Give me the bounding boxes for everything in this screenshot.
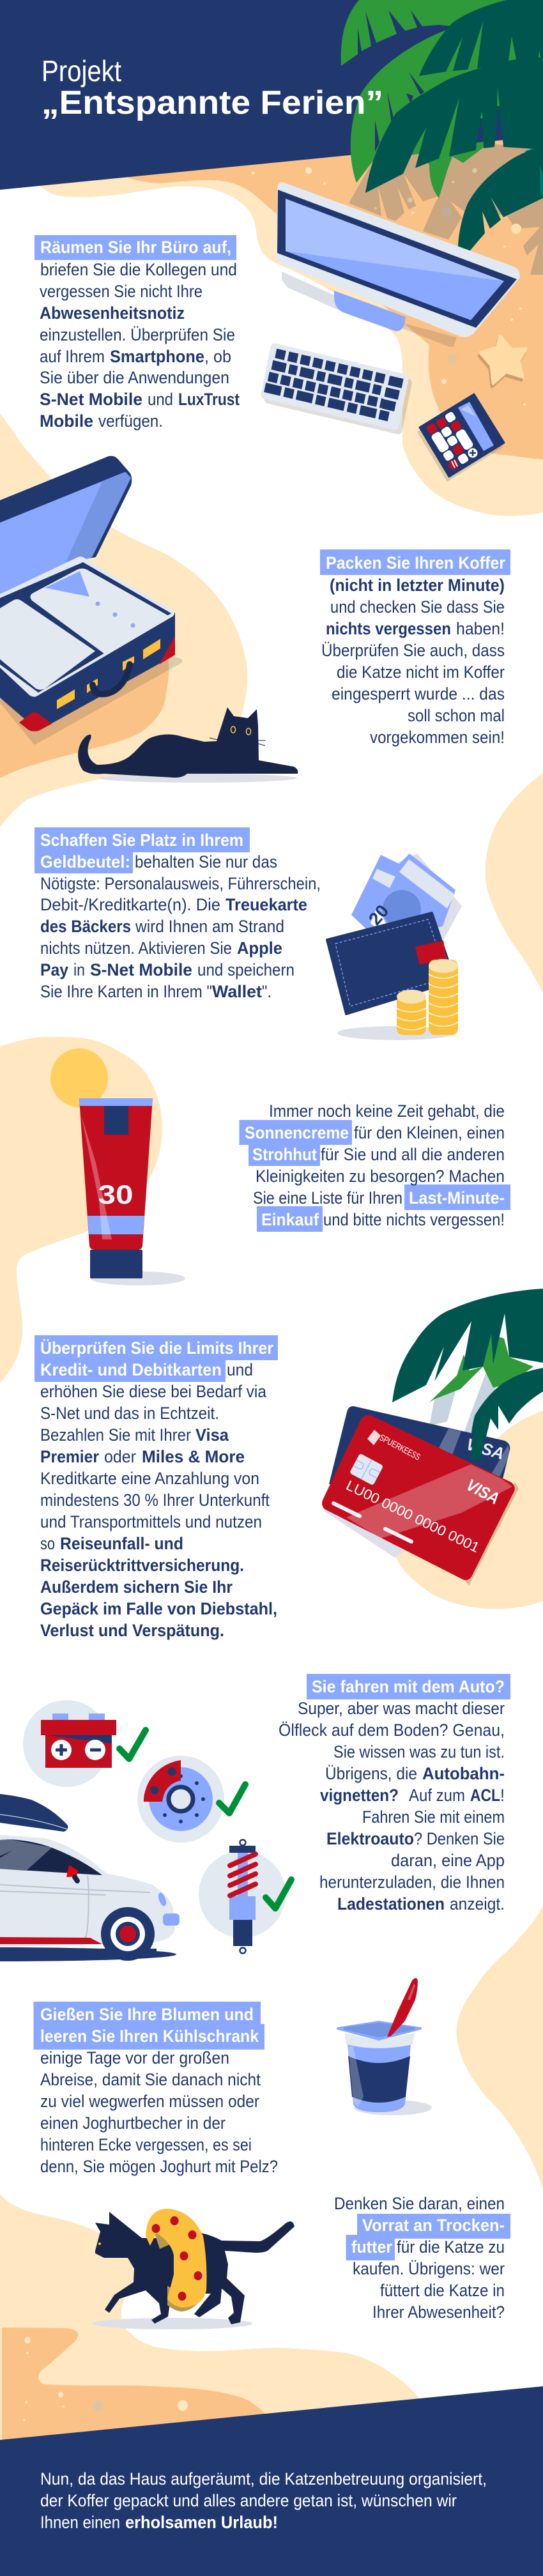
background: bottom sand dark with pebbles xyxy=(2,2327,265,2447)
text block: Kühlschrank: einen Joghurtbecher in der xyxy=(40,2113,226,2133)
text block: Büro: Abwesenheitsnotiz xyxy=(40,303,185,323)
text block: Koffer: haben! xyxy=(456,619,505,638)
text block: Kühlschrank: Gießen Sie Ihre Blumen und xyxy=(40,2005,254,2024)
text block: Kühlschrank: denn, Sie mögen Joghurt mit Pelz? xyxy=(40,2157,278,2176)
footer text: Ihnen einen xyxy=(40,2513,120,2532)
text block: Sonnencreme: Immer noch keine Zeit gehabt, die xyxy=(269,1101,505,1121)
text block: Kühlschrank: zu viel wegwerfen müssen oder xyxy=(40,2092,259,2111)
text block: Büro: einzustellen. Überprüfen Sie xyxy=(40,325,235,344)
background: top sand dark xyxy=(128,115,543,459)
text block: Koffer: nichts vergessen xyxy=(326,619,451,638)
text block: Limits: mindestens 30 % Ihrer Unterkunft xyxy=(40,1491,270,1510)
icon: shock absorber xyxy=(199,1840,286,1954)
text block: Sonnencreme: Last-Minute- xyxy=(409,1188,505,1208)
header band xyxy=(0,0,543,190)
text block: Koffer: die Katze nicht im Koffer xyxy=(337,663,505,682)
icon: car battery xyxy=(23,1700,116,1787)
text block: Limits: S-Net und das in Echtzeit. xyxy=(40,1404,219,1423)
text block: Trockenfutter: futter xyxy=(351,2237,392,2257)
text block: Koffer: vorgekommen sein! xyxy=(370,728,505,747)
icon: bank cards: SPUERKEESS xyxy=(378,1432,422,1462)
text block: Limits: Verlust und Verspätung. xyxy=(40,1621,224,1640)
footer band xyxy=(0,2386,543,2576)
icon: wallet with banknotes and coins xyxy=(327,854,462,1040)
text block: Auto: herunterzuladen, die Ihnen xyxy=(319,1873,505,1892)
text block: Trockenfutter: füttert die Katze in xyxy=(380,2281,505,2300)
text block: Geldbeutel: ". xyxy=(262,982,272,1001)
icon: lying cat xyxy=(78,707,298,783)
text block: Limits: oder xyxy=(104,1447,136,1466)
text block: Büro: vergessen Sie nicht Ihre xyxy=(40,282,203,301)
footer text: der Koffer gepackt und alles andere getan ist, wünschen wir xyxy=(40,2491,457,2510)
text block: Sonnencreme: Einkauf xyxy=(261,1210,319,1229)
text block: Büro: und xyxy=(148,390,173,409)
text block: Limits: Miles & More xyxy=(142,1447,245,1466)
text block: Büro: Smartphone xyxy=(110,347,204,366)
text block: Geldbeutel: S-Net Mobile xyxy=(90,960,192,979)
text block: Auto: Auf zum xyxy=(409,1786,465,1805)
text block: Kühlschrank: einige Tage vor der großen xyxy=(40,2048,229,2067)
text block: Trockenfutter: kaufen. Übrigens: wer xyxy=(353,2259,505,2278)
text block: Kühlschrank: leeren Sie Ihren Kühlschrank xyxy=(40,2027,259,2046)
text block: Büro: briefen Sie die Kollegen und xyxy=(40,260,237,279)
text block: Limits: Kredit- und Debitkarten xyxy=(40,1360,222,1379)
icon: sun xyxy=(50,1048,108,1107)
text block: Sonnencreme: für Sie und all die anderen xyxy=(321,1145,505,1164)
text block: Auto: anzeigt. xyxy=(450,1894,505,1913)
text block: Geldbeutel: Pay xyxy=(40,960,68,979)
text block: Trockenfutter: für die Katze zu xyxy=(397,2237,505,2257)
background: suitcase sand light xyxy=(0,413,247,827)
icon: sunscreen tube xyxy=(79,1098,185,1285)
icon: bank cards: LU00 0000 0000 0001 xyxy=(344,1477,482,1556)
text block: Büro: verfügen. xyxy=(98,411,163,431)
icon: check mark 2 xyxy=(219,1784,245,1813)
text block: Limits: erhöhen Sie diese bei Bedarf via xyxy=(40,1382,266,1401)
icon: brake disc xyxy=(137,1756,224,1843)
text block: Büro: Räumen Sie Ihr Büro auf, xyxy=(40,238,231,257)
text block: Limits: Premier xyxy=(40,1447,99,1466)
text block: Geldbeutel: behalten Sie nur das xyxy=(135,852,277,871)
text block: Auto: Fahren Sie mit einem xyxy=(362,1807,505,1827)
text block: Koffer: eingesperrt wurde ... das xyxy=(332,684,505,703)
text block: Büro: Mobile xyxy=(40,411,93,431)
text block: Koffer: soll schon mal xyxy=(408,706,505,725)
text block: Sonnencreme: und bitte nichts vergessen! xyxy=(323,1210,505,1229)
icon: starfish xyxy=(479,336,526,387)
sand pebbles top xyxy=(252,167,526,406)
text block: Limits: so xyxy=(40,1534,55,1553)
background: card sand xyxy=(393,1411,543,1609)
text block: Auto: daran, eine App xyxy=(391,1851,505,1870)
text block: Limits xyxy=(34,1335,278,1640)
background: wallet sand xyxy=(486,773,543,993)
text block: Sonnencreme: Strohhut xyxy=(252,1145,317,1164)
text block: Limits: Kreditkarte eine Anzahlung von xyxy=(40,1469,259,1488)
text block: Auto: Ladestationen xyxy=(337,1894,445,1913)
text block: Geldbeutel: Schaffen Sie Platz in Ihrem xyxy=(40,831,243,850)
text block: Auto: Ölfleck auf dem Boden? Genau, xyxy=(279,1721,505,1740)
icon: bank cards: VISA xyxy=(463,1475,503,1508)
icon: walking cat with swim ring xyxy=(93,2209,294,2329)
text block: Auto: vignetten? xyxy=(320,1786,399,1805)
text block: Sonnencreme: Sonnencreme xyxy=(245,1123,349,1142)
text block: Geldbeutel: Apple xyxy=(237,939,282,958)
text block: Geldbeutel: Nötigste: Personalausweis, Führerschein, xyxy=(40,874,321,893)
text block: Trockenfutter xyxy=(334,2194,510,2322)
text block: Koffer: Überprüfen Sie auch, dass xyxy=(321,641,505,660)
text block: Trockenfutter: Vorrat an Trocken- xyxy=(362,2216,505,2235)
text block: Geldbeutel: wird Ihnen am Strand xyxy=(135,917,284,936)
footer text xyxy=(40,2469,487,2532)
text block: Trockenfutter: Denken Sie daran, einen xyxy=(334,2194,505,2213)
text block: Limits: Reiserücktrittversicherung. xyxy=(40,1556,244,1575)
footer text: Nun, da das Haus aufgeräumt, die Katzenbetreuung organisiert, xyxy=(40,2469,487,2488)
title xyxy=(42,54,383,121)
text block: Geldbeutel: Treuekarte xyxy=(226,895,307,914)
icon: check mark 1 xyxy=(119,1730,146,1759)
text block: Geldbeutel xyxy=(34,827,321,1001)
text block: Auto: ! xyxy=(500,1786,505,1805)
text block: Geldbeutel: in xyxy=(73,960,85,979)
text block: Trockenfutter: Ihrer Abwesenheit? xyxy=(372,2303,505,2322)
background: sunscreen sand xyxy=(0,1037,162,1383)
text block: Büro: S-Net Mobile xyxy=(40,390,142,409)
text block: Koffer xyxy=(320,549,510,747)
text block: Koffer: und checken Sie dass Sie xyxy=(330,597,505,617)
text block: Auto: Übrigens, die xyxy=(325,1764,417,1783)
text block: Geldbeutel: und speichern xyxy=(197,960,294,979)
icon: yoghurt cup with spoon xyxy=(338,1978,432,2115)
text block: Geldbeutel: Geldbeutel: xyxy=(40,852,130,871)
text block: Kühlschrank: hinteren Ecke vergessen, es sei xyxy=(40,2135,252,2154)
icon: computer monitor xyxy=(277,182,520,347)
text block: Büro: LuxTrust xyxy=(178,390,240,409)
text block: Koffer: (nicht in letzter Minute) xyxy=(330,576,505,595)
icon: keyboard xyxy=(260,342,413,435)
text block: Sonnencreme: für den Kleinen, einen xyxy=(354,1123,505,1142)
text block: Auto: Super, aber was macht dieser xyxy=(298,1699,505,1718)
text block: Auto: Elektroauto xyxy=(326,1829,414,1848)
text block: Limits: Bezahlen Sie mit Ihrer xyxy=(40,1425,191,1445)
text block: Auto: ? Denken Sie xyxy=(414,1829,505,1848)
title: „Entspannte Ferien” xyxy=(42,84,383,121)
text block: Büro xyxy=(34,235,240,431)
text block: Sonnencreme: Kleinigkeiten zu besorgen? Machen xyxy=(256,1167,505,1186)
background: yoghurt sand xyxy=(457,1906,543,2189)
text block: Büro: , ob xyxy=(204,347,231,366)
footer text: erholsamen Urlaub! xyxy=(125,2513,278,2532)
text block: Auto: Sie wissen was zu tun ist. xyxy=(333,1742,505,1761)
text block: Limits: Überprüfen Sie die Limits Ihrer xyxy=(40,1338,273,1358)
text block: Büro: auf Ihrem xyxy=(40,347,105,366)
text block: Auto: ACL xyxy=(470,1786,500,1805)
icon: open suitcase xyxy=(0,456,182,745)
background: bottom sand light xyxy=(0,2195,419,2447)
text block: Sonnencreme xyxy=(239,1101,510,1232)
text block: Auto: Autobahn- xyxy=(422,1764,505,1783)
text block: Auto: Sie fahren mit dem Auto? xyxy=(312,1677,505,1696)
text block: Geldbeutel: Debit-/Kreditkarte(n). Die xyxy=(40,895,220,914)
palm tree top with shadows xyxy=(341,0,543,275)
text block: Limits: und Transportmittels und nutzen xyxy=(40,1512,262,1531)
icon: sunscreen tube: 30 xyxy=(98,1179,133,1209)
text block: Limits: und xyxy=(227,1360,253,1379)
text block: Auto xyxy=(279,1674,510,1913)
text block: Limits: Außerdem sichern Sie Ihr xyxy=(40,1577,233,1597)
icon: car with roof box xyxy=(0,1794,180,1961)
text block: Koffer: Packen Sie Ihren Koffer xyxy=(326,553,505,572)
background: suitcase sand dark xyxy=(0,613,169,778)
text block: Geldbeutel: Sie Ihre Karten in Ihrem " xyxy=(40,982,212,1001)
background: top sand light xyxy=(40,128,543,516)
text block: Geldbeutel: Wallet xyxy=(212,982,262,1001)
title: Projekt xyxy=(42,54,121,88)
text block: Büro: Sie über die Anwendungen xyxy=(40,368,229,387)
palm tree middle xyxy=(392,1289,543,1460)
text block: Limits: Reiseunfall- und xyxy=(60,1534,183,1553)
icon: bank cards xyxy=(322,1399,519,1586)
text block: Limits: Gepäck im Falle von Diebstahl, xyxy=(40,1599,277,1618)
icon: bank cards: VISA xyxy=(464,1434,507,1463)
text block: Geldbeutel: des Bäckers xyxy=(40,917,131,936)
text block: Limits: Visa xyxy=(195,1425,229,1445)
icon: check mark 3 xyxy=(266,1880,291,1908)
text block: Sonnencreme: Sie eine Liste für Ihren xyxy=(253,1188,402,1208)
text block: Kühlschrank xyxy=(33,2002,278,2176)
text block: Kühlschrank: Abreise, damit Sie danach nicht xyxy=(40,2070,261,2089)
icon: calculator xyxy=(417,394,504,482)
text block: Geldbeutel: nichts nützen. Aktivieren Sie xyxy=(40,939,232,958)
icon: wallet with banknotes and coins: 20 xyxy=(365,901,393,929)
